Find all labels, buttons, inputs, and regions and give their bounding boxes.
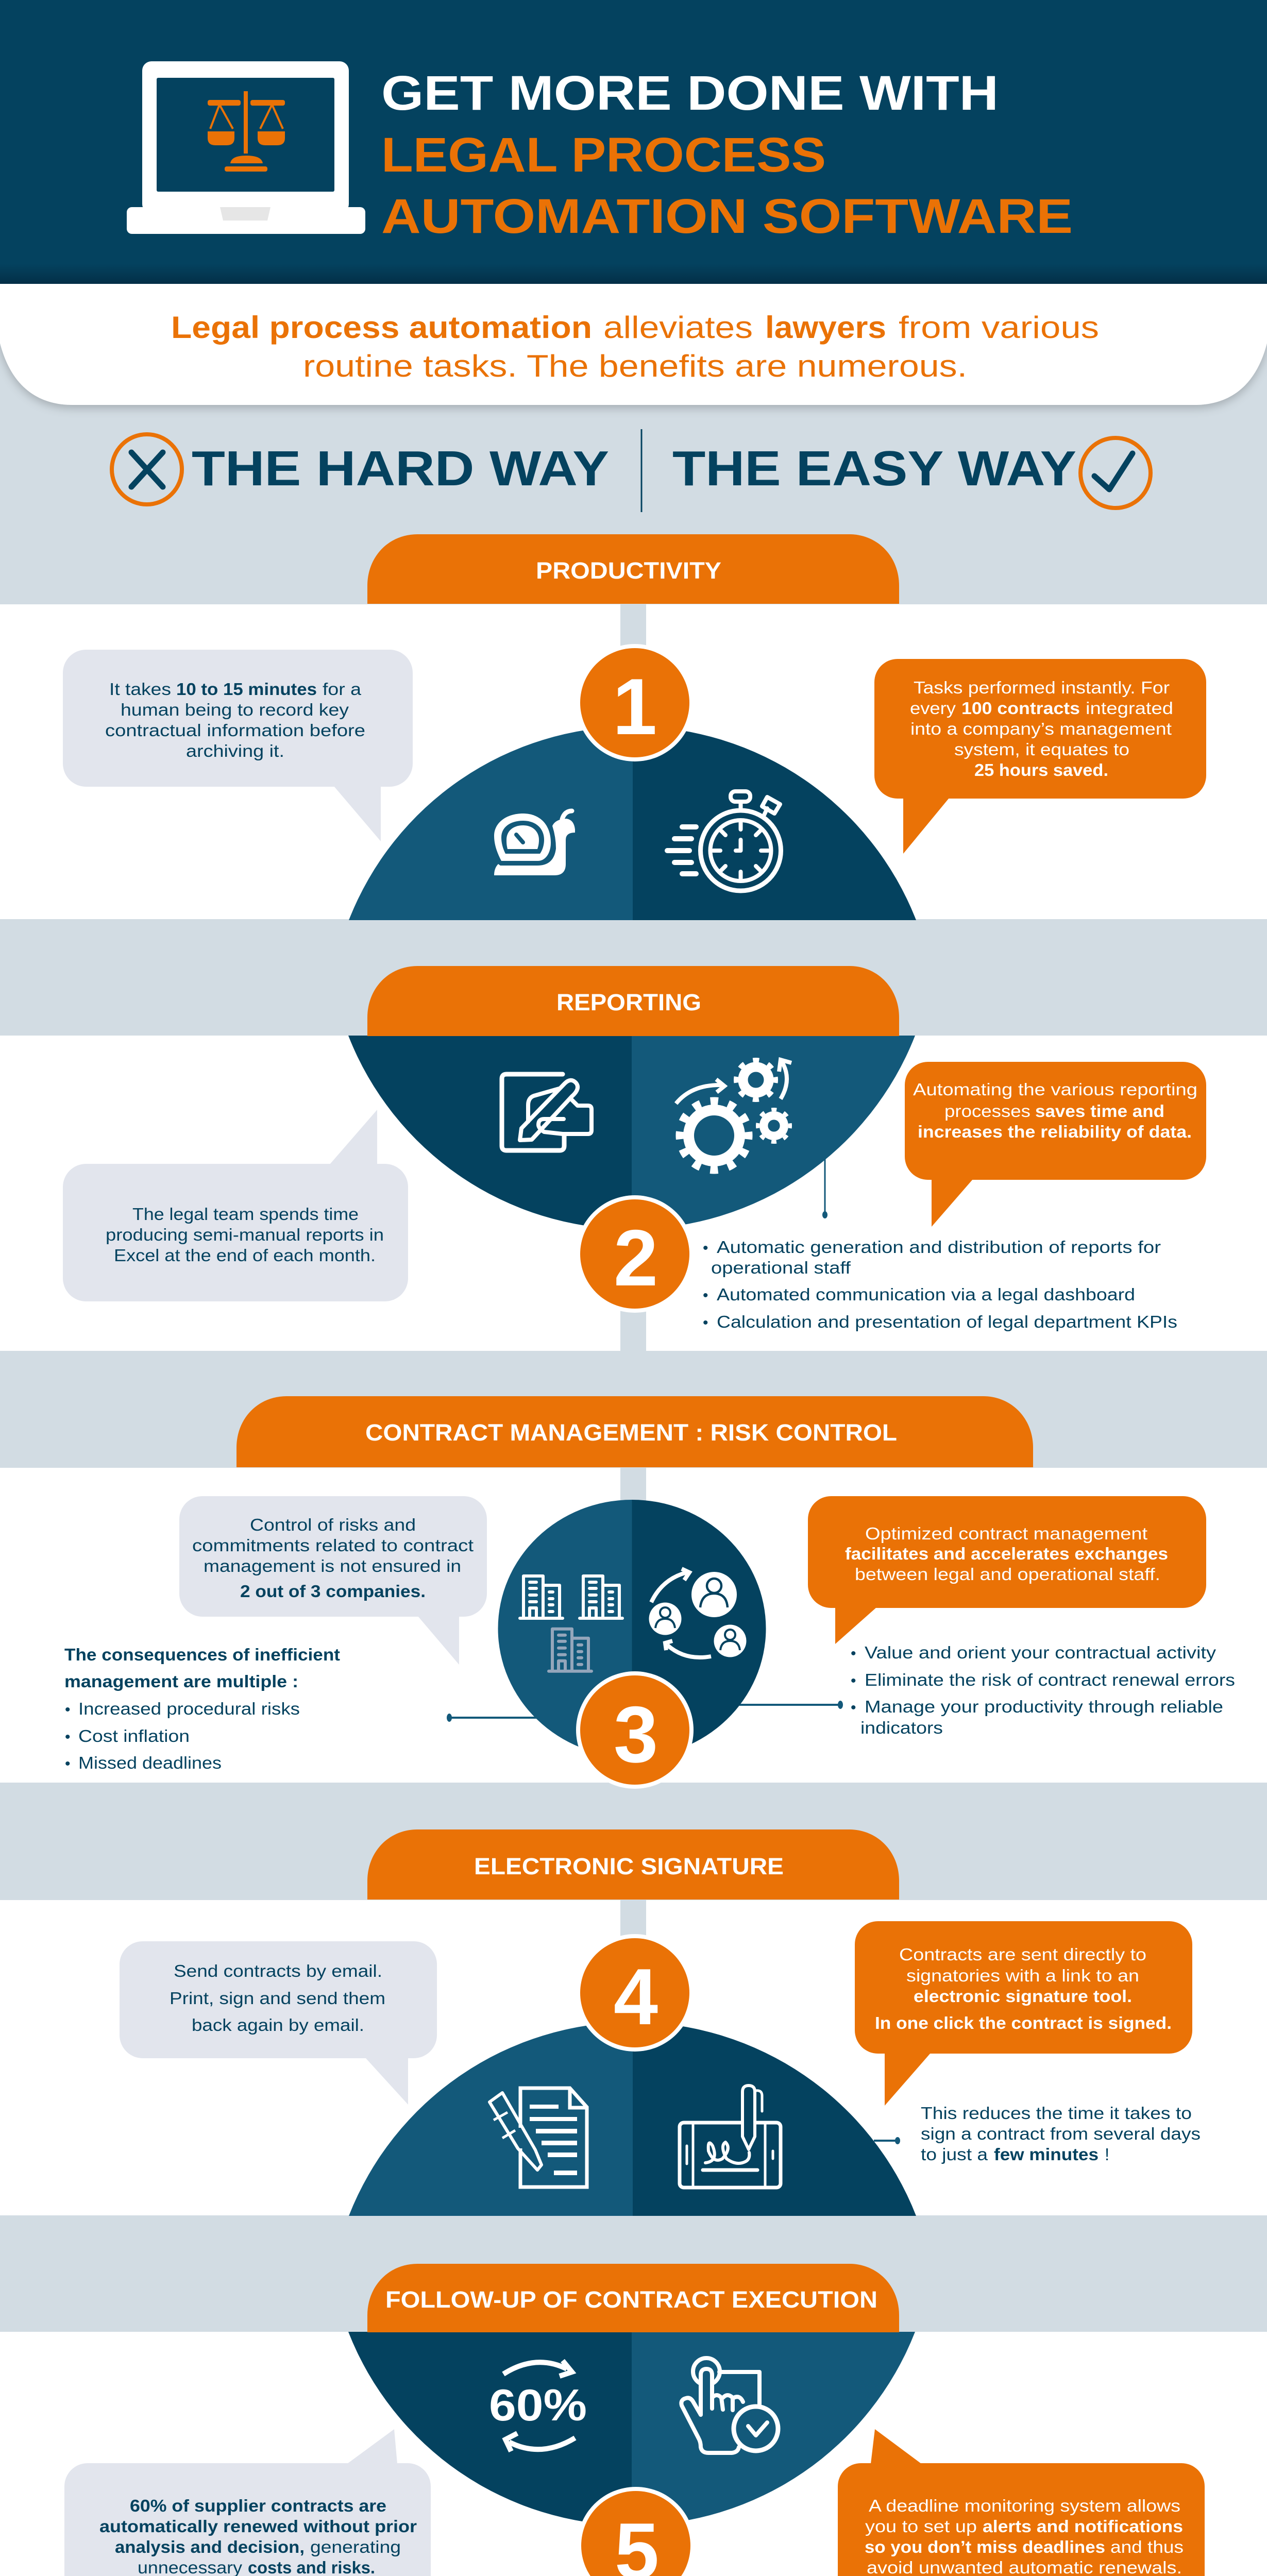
half disc <box>349 726 916 920</box>
half disc <box>348 2332 915 2526</box>
icon: hand and check <box>681 2358 778 2453</box>
callout: easy way: In one click the contract is signed. <box>875 2013 1172 2032</box>
callout: hard way <box>63 1110 408 1301</box>
icon: renewal 60%: 60% <box>489 2381 587 2430</box>
callout: hard way <box>64 2429 431 2576</box>
icon: cross <box>112 434 182 504</box>
heading tab: ELECTRONIC SIGNATURE <box>474 1853 784 1879</box>
callout: hard way: for a <box>323 680 362 699</box>
icon: check <box>1080 438 1151 508</box>
benefits list: • <box>851 1672 856 1689</box>
title: LEGAL PROCESS <box>381 128 826 182</box>
callout: easy way: Optimized contract management <box>865 1524 1147 1543</box>
connector left <box>447 1714 537 1722</box>
number 4 <box>576 1934 694 2052</box>
benefits list: • <box>703 1287 708 1304</box>
callout: hard way: 10 to 15 minutes <box>176 680 317 699</box>
connector right <box>739 1701 843 1709</box>
callout: hard way <box>120 1941 437 2105</box>
note text: to just a <box>921 2145 988 2164</box>
consequences list: Cost inflation <box>78 1726 190 1745</box>
section 5: follow-up of contract execution <box>0 2264 1267 2576</box>
number 5 <box>577 2487 695 2576</box>
heading tab <box>236 1396 1033 1467</box>
note text: This reduces the time it takes to <box>921 2104 1192 2123</box>
callout: easy way <box>855 1921 1192 2106</box>
callout: hard way <box>63 650 413 841</box>
icon: document and pen <box>502 1074 592 1150</box>
number 1: 1 <box>613 662 657 751</box>
callout: easy way <box>838 2429 1205 2576</box>
callout: easy way: processes <box>944 1101 1031 1121</box>
callout: hard way: back again by email. <box>192 2015 364 2035</box>
title: AUTOMATION SOFTWARE <box>381 189 1073 244</box>
callout: easy way: signatories with a link to an <box>906 1966 1139 1985</box>
callout: hard way: human being to record key <box>121 700 349 719</box>
icon: people exchange <box>649 1569 746 1657</box>
header banner <box>0 0 1267 284</box>
callout: hard way: Send contracts by email. <box>174 1961 382 1980</box>
callout: hard way: automatically renewed without prior <box>99 2517 417 2536</box>
note text: sign a contract from several days <box>921 2124 1201 2143</box>
heading tab <box>367 966 899 1036</box>
callout: easy way: so you don’t miss deadlines <box>865 2537 1105 2556</box>
callout: easy way: 25 hours saved. <box>974 760 1108 779</box>
heading tab: PRODUCTIVITY <box>536 557 721 584</box>
icon: laptop with scales <box>127 61 365 234</box>
callout: easy way: 100 contracts <box>961 699 1080 718</box>
benefits list: Manage your productivity through reliable <box>865 1697 1223 1716</box>
callout: easy way: integrated <box>1086 699 1173 718</box>
icon: gears <box>676 1060 791 1170</box>
callout: easy way <box>808 1496 1206 1644</box>
callout: hard way: Print, sign and send them <box>170 1989 385 2008</box>
callout: hard way: management is not ensured in <box>204 1556 461 1575</box>
disc <box>498 1500 766 1757</box>
benefits list: • <box>851 1645 856 1662</box>
half disc <box>349 2022 916 2216</box>
heading tab <box>367 534 899 604</box>
section 2: reporting <box>0 966 1267 1351</box>
callout: easy way: and thus <box>1110 2537 1184 2556</box>
heading tab <box>367 1829 899 1900</box>
callout: hard way: producing semi-manual reports in <box>106 1225 384 1244</box>
benefits list: • <box>851 1699 856 1716</box>
callout: hard way: It takes <box>109 680 171 699</box>
title <box>381 66 1073 244</box>
callout: hard way <box>179 1496 487 1665</box>
note text: ! <box>1105 2145 1109 2164</box>
number 1 <box>576 644 694 761</box>
callout: hard way: analysis and decision, <box>115 2537 305 2556</box>
callout: hard way: The legal team spends time <box>132 1205 359 1224</box>
title: GET MORE DONE WITH <box>381 66 999 121</box>
callout: easy way: Contracts are sent directly to <box>899 1945 1146 1964</box>
connector <box>822 1159 827 1218</box>
consequences list: • <box>65 1728 71 1745</box>
benefits list: • <box>703 1314 708 1331</box>
note text <box>921 2104 1201 2164</box>
icon: tablet signature <box>680 2086 781 2188</box>
intro text: Legal process automation <box>171 310 592 345</box>
consequences list: Missed deadlines <box>78 1753 222 1772</box>
intro text <box>171 310 1099 383</box>
callout: easy way: electronic signature tool. <box>914 1987 1132 2006</box>
icon: buildings <box>520 1576 622 1671</box>
intro text: lawyers <box>765 310 886 345</box>
callout: easy way <box>905 1062 1206 1227</box>
icon: stopwatch <box>667 791 781 891</box>
easy way label: THE EASY WAY <box>672 441 1076 496</box>
number 2 <box>576 1195 694 1313</box>
callout: easy way: saves time and <box>1035 1101 1164 1121</box>
callout: easy way <box>874 659 1206 854</box>
callout: hard way: Excel at the end of each month. <box>114 1246 376 1265</box>
number 4: 4 <box>614 1952 658 2041</box>
callout: easy way: Tasks performed instantly. For <box>914 678 1170 697</box>
benefits list: Calculation and presentation of legal department KPIs <box>717 1312 1177 1331</box>
half disc <box>348 1036 915 1229</box>
callout: easy way: you to set up <box>865 2517 977 2536</box>
callout: hard way: commitments related to contract <box>192 1536 474 1555</box>
callout: easy way: system, it equates to <box>954 740 1129 759</box>
intro text: routine tasks. The benefits are numerous. <box>303 349 967 383</box>
callout: easy way: facilitates and accelerates exchanges <box>845 1544 1168 1563</box>
callout: easy way: Automating the various reporting <box>913 1080 1197 1099</box>
callout: hard way: generating <box>310 2537 401 2556</box>
intro text: alleviates <box>603 310 753 345</box>
consequences list <box>64 1645 340 1772</box>
heading tab: FOLLOW-UP OF CONTRACT EXECUTION <box>385 2286 877 2313</box>
heading tab <box>367 2264 899 2332</box>
intro text: from various <box>899 310 1099 345</box>
benefits list: Automatic generation and distribution of reports for <box>717 1238 1161 1257</box>
number 3 <box>576 1671 694 1789</box>
benefits list: Value and orient your contractual activity <box>865 1643 1217 1662</box>
heading tab: REPORTING <box>556 989 701 1015</box>
hard way label: THE HARD WAY <box>192 441 609 496</box>
consequences list: The consequences of inefficient <box>64 1645 340 1664</box>
callout: easy way: into a company’s management <box>910 719 1172 738</box>
benefits list: operational staff <box>711 1258 851 1277</box>
benefits list: indicators <box>860 1718 943 1737</box>
callout: hard way: 60% of supplier contracts are <box>130 2496 386 2515</box>
heading tab: CONTRACT MANAGEMENT : RISK CONTROL <box>365 1419 897 1446</box>
callout: easy way: increases the reliability of data. <box>918 1122 1192 1141</box>
icon: renewal 60% <box>489 2361 587 2451</box>
benefits list: Automated communication via a legal dashboard <box>717 1285 1135 1304</box>
callout: hard way: Control of risks and <box>250 1515 416 1534</box>
callout: easy way: alerts and notifications <box>983 2517 1183 2536</box>
callout: easy way: every <box>910 699 956 718</box>
consequences list: management are multiple : <box>64 1672 298 1691</box>
icon: snail <box>494 811 575 875</box>
note text: few minutes <box>994 2145 1099 2164</box>
comparison heading <box>112 429 1151 512</box>
number 2: 2 <box>614 1213 658 1302</box>
callout: easy way: between legal and operational staff. <box>855 1565 1160 1584</box>
consequences list: Increased procedural risks <box>78 1699 300 1718</box>
consequences list: • <box>65 1755 71 1772</box>
consequences list: • <box>65 1701 71 1718</box>
callout: hard way: contractual information before <box>105 721 365 740</box>
intro panel <box>0 278 1267 405</box>
section 1: productivity <box>0 534 1267 920</box>
callout: hard way: archiving it. <box>186 741 284 760</box>
benefits list: • <box>703 1240 708 1257</box>
benefits list <box>703 1238 1177 1331</box>
icon: document and quill <box>489 2088 587 2187</box>
benefits list: Eliminate the risk of contract renewal errors <box>865 1670 1235 1689</box>
section 3: contract management <box>0 1396 1267 1789</box>
callout: easy way: A deadline monitoring system allows <box>869 2496 1180 2515</box>
benefits list <box>851 1643 1235 1737</box>
section 4: electronic signature <box>0 1829 1267 2216</box>
callout: hard way: 2 out of 3 companies. <box>240 1582 426 1601</box>
number 3: 3 <box>614 1690 658 1779</box>
connector <box>874 2137 900 2144</box>
